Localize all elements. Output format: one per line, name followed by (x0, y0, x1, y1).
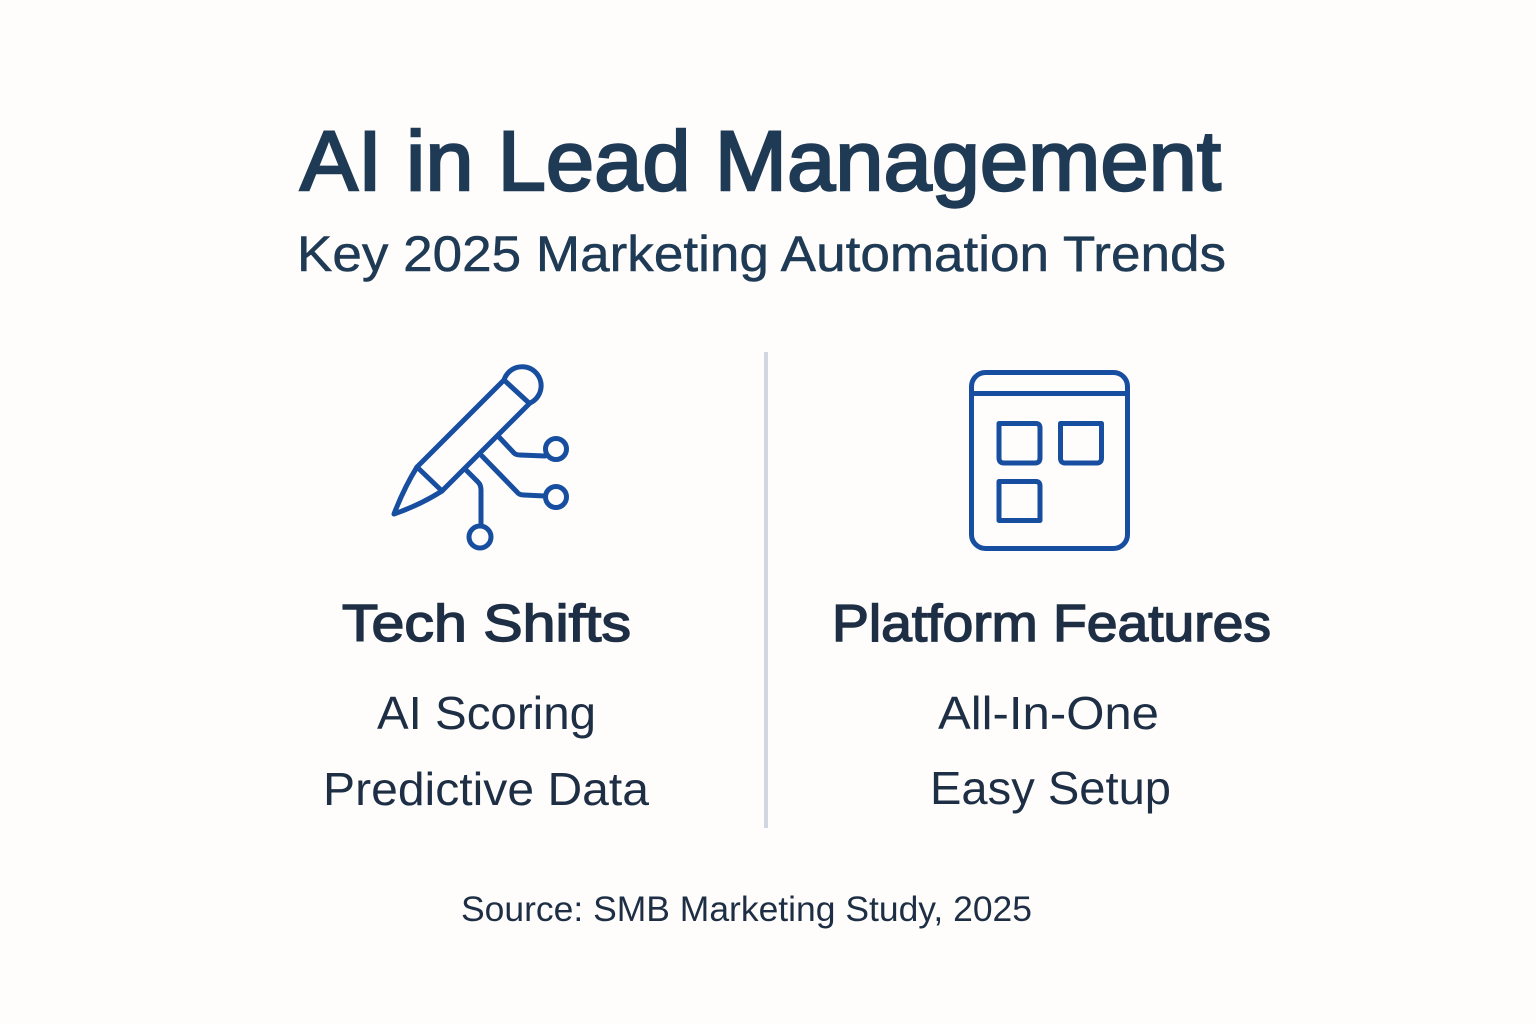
item: AI scoring: AI Scoring (377, 687, 596, 739)
panel: tech shifts (323, 367, 649, 815)
panel: platform features (832, 372, 1271, 814)
subtitle: Key 2025 Marketing Automation Trends (297, 226, 1226, 282)
item: all-in-one: All-In-One (938, 687, 1159, 739)
item: predictive data: Predictive Data (323, 763, 649, 815)
divider (764, 352, 768, 828)
title: AI in Lead Management (300, 114, 1221, 208)
icon: app window with tiles (972, 372, 1128, 548)
heading: platform features: Platform Features (832, 595, 1271, 653)
source note: Source: SMB Marketing Study, 2025 (461, 890, 1032, 929)
item: easy setup: Easy Setup (930, 762, 1171, 814)
heading: tech shifts: Tech Shifts (342, 595, 631, 653)
icon: pen with circuit nodes (394, 367, 566, 548)
